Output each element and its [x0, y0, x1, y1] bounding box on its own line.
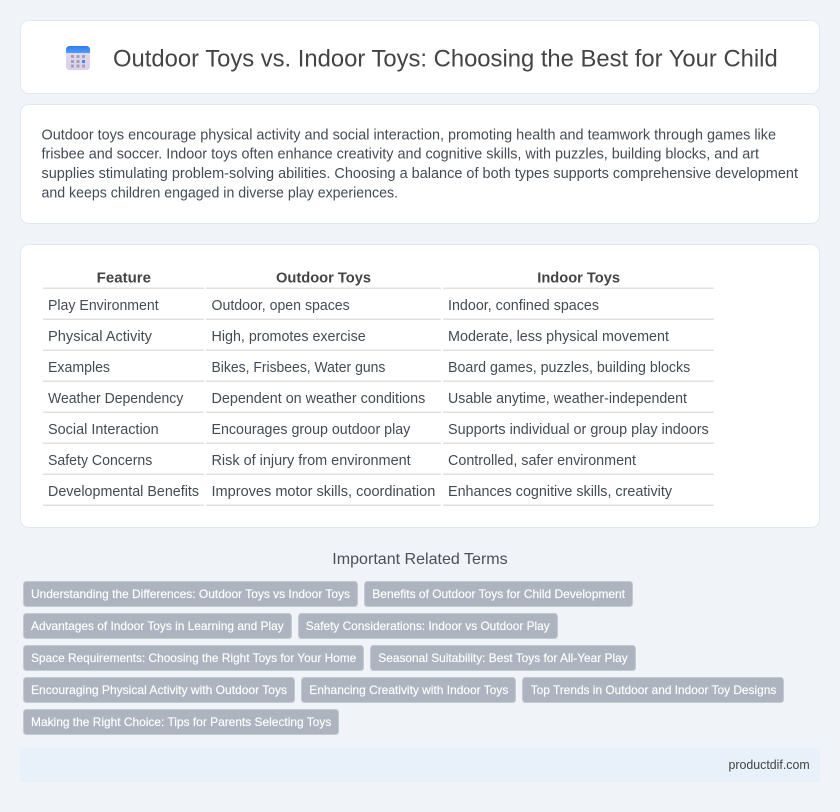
tag: understanding the differences	[24, 582, 358, 606]
title: Outdoor Toys vs. Indoor Toys: Choosing the Best for Your Child	[113, 46, 778, 73]
table row: physical activity: Moderate, less physical movement	[448, 329, 669, 345]
table row: physical activity: Physical Activity	[48, 329, 153, 345]
tag: advantages of indoor toys: Advantages of Indoor Toys in Learning and Play	[31, 619, 284, 633]
table header row: Feature	[97, 271, 151, 287]
table row: developmental benefits	[43, 484, 714, 506]
tag: top trends: Top Trends in Outdoor and Indoor Toy Designs	[531, 683, 776, 697]
tag: understanding the differences: Understanding the Differences: Outdoor Toys vs Indoor Toys	[31, 587, 350, 601]
tag: space requirements: Space Requirements: Choosing the Right Toys for Your Home	[31, 651, 357, 665]
icon: calendar grid	[66, 46, 90, 70]
table row: examples: Examples	[48, 360, 110, 376]
tag: space requirements	[24, 646, 364, 670]
table row: physical activity: High, promotes exercise	[212, 329, 366, 345]
tag: seasonal suitability	[370, 646, 636, 670]
table row: play environment: Indoor, confined spaces	[448, 298, 599, 314]
table row: physical activity	[43, 329, 714, 351]
panel: page header	[20, 20, 820, 94]
table row: weather dependency	[43, 391, 714, 413]
table header row: Indoor Toys	[537, 271, 620, 287]
table row: safety concerns	[43, 453, 714, 475]
table row: play environment: Outdoor, open spaces	[212, 298, 350, 314]
panel: introduction	[20, 104, 820, 224]
table row: examples: Board games, puzzles, building blocks	[448, 360, 690, 376]
table row: social interaction: Encourages group outdoor play	[212, 422, 411, 438]
panel: related term tags	[24, 582, 784, 734]
table row: weather dependency: Weather Dependency	[48, 391, 184, 407]
panel: comparison table	[20, 244, 820, 528]
table row: social interaction: Social Interaction	[48, 422, 159, 438]
table row: developmental benefits: Improves motor skills, coordination	[212, 484, 435, 500]
table row: examples	[43, 360, 714, 382]
table row: safety concerns: Risk of injury from environment	[212, 453, 411, 469]
tag: safety considerations: Safety Considerations: Indoor vs Outdoor Play	[306, 619, 550, 633]
tag: making the right choice: Making the Right Choice: Tips for Parents Selecting Toys	[31, 715, 331, 729]
tag: benefits of outdoor toys	[364, 582, 632, 606]
table row: play environment	[43, 298, 714, 320]
tag: top trends	[522, 678, 784, 702]
tag: advantages of indoor toys	[24, 614, 292, 638]
tag: seasonal suitability: Seasonal Suitability: Best Toys for All-Year Play	[378, 651, 628, 665]
table row: developmental benefits: Enhances cognitive skills, creativity	[448, 484, 673, 500]
footer source text: productdif.com	[728, 758, 810, 772]
heading: important related terms: Important Related Terms	[332, 551, 508, 568]
table header row	[43, 271, 714, 289]
text block: introduction paragraph: Outdoor toys encourage physical activity and social interaction, promoting health and teamwork through games like	[42, 127, 776, 143]
tag: enhancing creativity	[302, 678, 516, 702]
tag: enhancing creativity: Enhancing Creativity with Indoor Toys	[309, 683, 508, 697]
tag: benefits of outdoor toys: Benefits of Outdoor Toys for Child Development	[372, 587, 626, 601]
text block: introduction paragraph: and keeps children engaged in diverse play experiences.	[42, 185, 398, 201]
table row: safety concerns: Safety Concerns	[48, 453, 152, 469]
text block: introduction paragraph: supplies stimulating problem-solving abilities. Choosing a balance of both types supports comprehensive development	[42, 166, 798, 182]
tag: making the right choice	[24, 710, 338, 734]
table row: weather dependency: Usable anytime, weather-independent	[448, 391, 687, 407]
table row: weather dependency: Dependent on weather conditions	[212, 391, 425, 407]
table row: examples: Bikes, Frisbees, Water guns	[212, 360, 385, 376]
text block: introduction paragraph	[42, 127, 798, 201]
table row: social interaction: Supports individual or group play indoors	[448, 422, 709, 438]
table row: developmental benefits: Developmental Benefits	[48, 484, 199, 500]
table row: social interaction	[43, 422, 714, 444]
footer bar	[20, 748, 820, 782]
table row: safety concerns: Controlled, safer environment	[448, 453, 636, 469]
tag: encouraging physical activity	[24, 678, 294, 702]
table row: play environment: Play Environment	[48, 298, 159, 314]
tag: safety considerations	[298, 614, 558, 638]
tag: encouraging physical activity: Encouraging Physical Activity with Outdoor Toys	[31, 683, 287, 697]
table header row: Outdoor Toys	[276, 271, 371, 287]
text block: introduction paragraph: frisbee and soccer. Indoor toys often enhance creativity and cognitive skills, with puzzles, building blocks, and art	[42, 147, 759, 163]
